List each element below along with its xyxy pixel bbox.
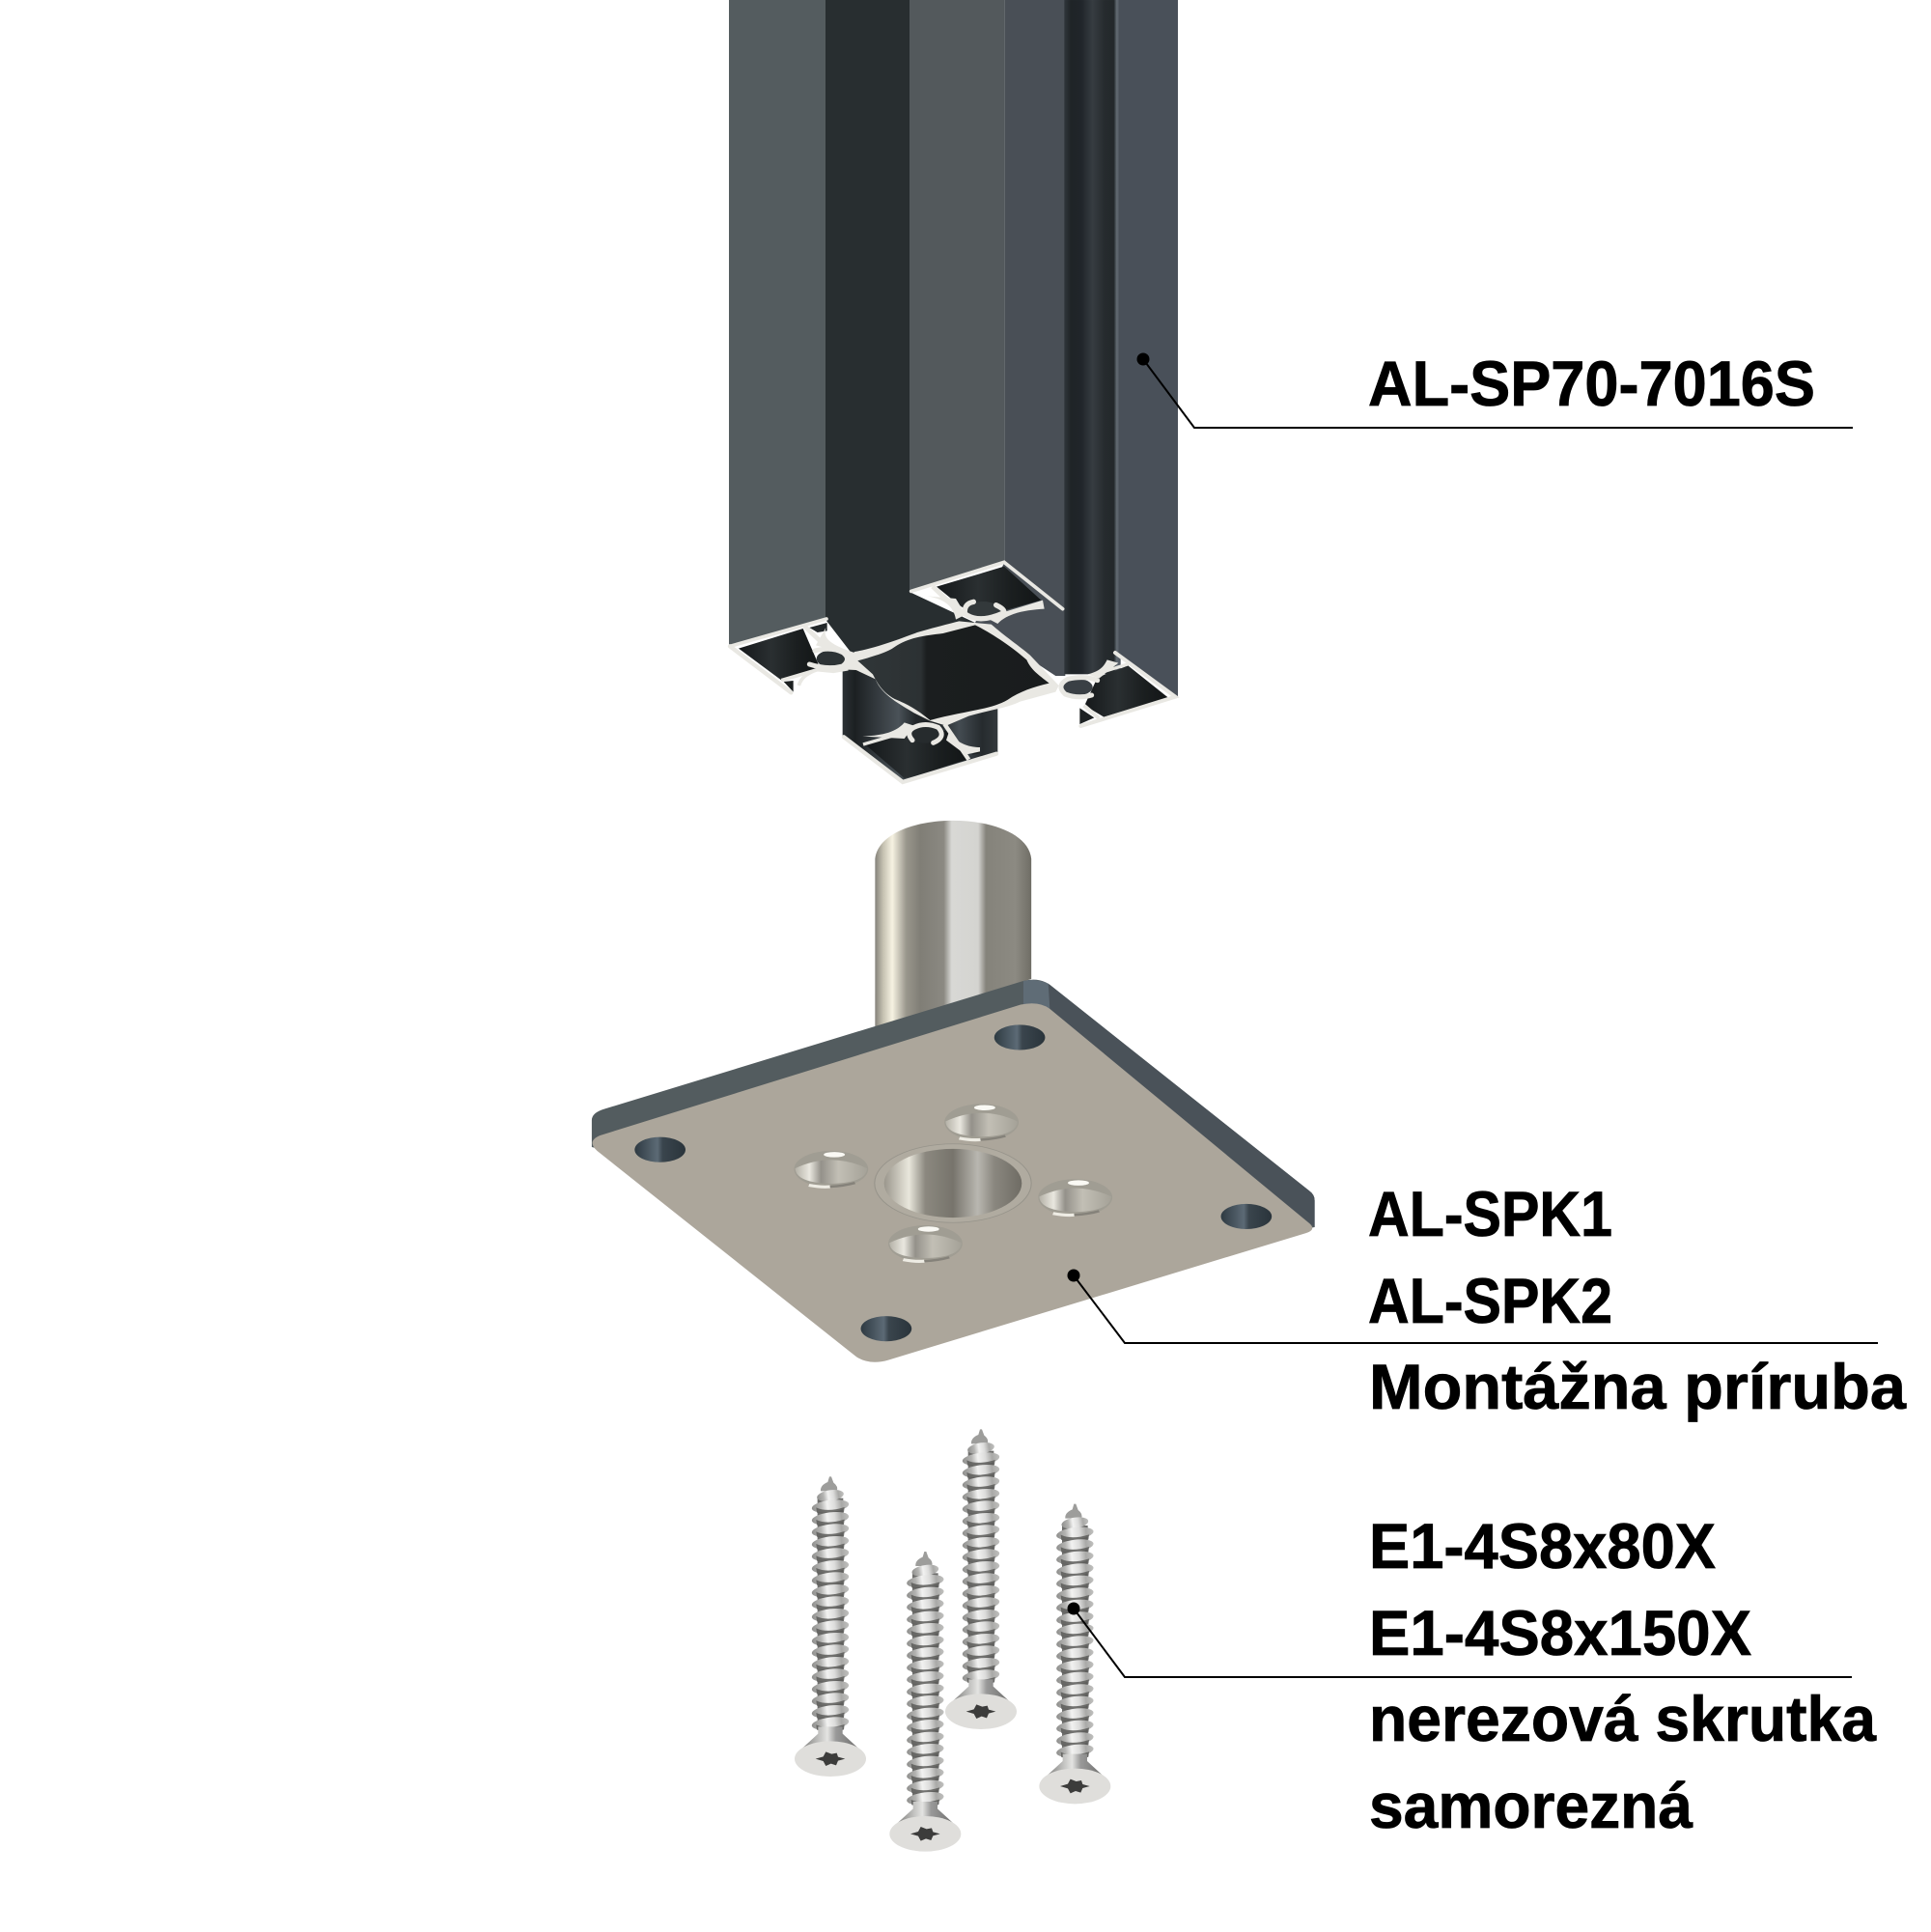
profile cut: left chamber [730,619,854,692]
profile cut: right chamber [1059,653,1175,726]
callout: E1-4S8 screws: E1-4S8x150X [1369,1597,1751,1668]
callout: AL-SPK1 AL-SPK2 Montážna príruba: AL-SPK2 [1368,1265,1612,1336]
callout: E1-4S8 screws [1068,1510,1877,1841]
profile cut: upper chamber [911,562,1063,624]
callout: AL-SPK1 AL-SPK2 Montážna príruba: AL-SPK1 [1368,1178,1612,1249]
panel: mounting flange [592,821,1315,1362]
lower protrusion [843,669,997,783]
profile cut: lower chamber [844,722,996,782]
callout: AL-SP70-7016S [1137,348,1853,428]
screw 4 [1039,1504,1110,1804]
post middle face [910,0,1005,591]
stainless tube [875,821,1031,1026]
countersunk holes [794,1104,1112,1262]
screw 3 [945,1429,1017,1729]
callout: AL-SPK1 AL-SPK2 Montážna príruba: Montážna príruba [1369,1351,1907,1422]
post dark channel [826,0,975,655]
screw 2 [889,1552,961,1852]
panel: stainless screws [795,1429,1110,1852]
flange face [593,1003,1312,1362]
profile cut: central chamber [843,621,1059,726]
callout: AL-SPK1 AL-SPK2 Montážna príruba [1068,1178,1907,1422]
post inner side face [975,0,1065,676]
post groove [1064,0,1121,674]
post right face [1119,0,1178,697]
mounting holes [634,1024,1272,1341]
callout: E1-4S8 screws: samorezná [1369,1770,1693,1841]
screw 1 [795,1476,866,1777]
callout: E1-4S8 screws: nerezová skrutka [1369,1683,1877,1754]
callout: AL-SP70-7016S: AL-SP70-7016S [1368,348,1815,419]
panel: aluminium post AL-SP70 [729,0,1178,783]
callout: E1-4S8 screws: E1-4S8x80X [1369,1510,1716,1582]
post left face [729,0,826,646]
flange edge: left side [592,980,1315,1269]
centre bore [875,1144,1031,1222]
flange edge: right side [1026,981,1315,1227]
